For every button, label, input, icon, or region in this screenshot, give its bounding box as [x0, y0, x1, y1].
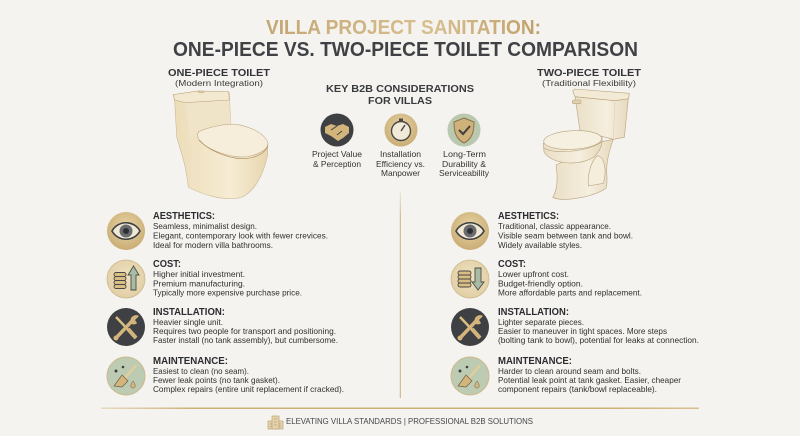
cost row — [451, 258, 642, 298]
consideration: long-term durability: Serviceability — [439, 168, 490, 178]
icon: broom — [451, 357, 489, 395]
consideration: project value — [312, 114, 362, 169]
maintenance row: Fewer leak points (no tank gasket). — [153, 375, 280, 385]
cost row: Higher initial investment. — [153, 269, 245, 279]
aesthetics row — [451, 210, 633, 250]
illustration: one-piece toilet — [173, 91, 268, 199]
icon: crossed tools — [107, 308, 145, 346]
icon: coins and down arrow — [451, 260, 489, 298]
consideration: project value: Project Value — [312, 149, 362, 159]
icon: stopwatch — [384, 114, 418, 146]
maintenance row: Complex repairs (entire unit replacement if cracked). — [153, 384, 344, 394]
maintenance row: MAINTENANCE: — [153, 355, 228, 367]
title — [173, 17, 638, 61]
installation row: Easier to maneuver in tight spaces. More steps — [498, 326, 667, 336]
aesthetics row: Seamless, minimalist design. — [153, 221, 257, 231]
installation row — [107, 306, 338, 346]
heading: key B2B considerations — [326, 83, 474, 107]
footer — [268, 416, 533, 429]
cost row: COST: — [498, 258, 526, 270]
installation row — [451, 306, 699, 346]
consideration: installation efficiency: Installation — [380, 149, 421, 159]
installation row: INSTALLATION: — [153, 306, 225, 318]
icon: broom — [107, 357, 145, 395]
maintenance row — [107, 355, 344, 395]
installation row: Lighter separate pieces. — [498, 317, 584, 327]
cost row: COST: — [153, 258, 181, 270]
heading: one-piece toilet: (Modern Integration) — [175, 78, 263, 88]
aesthetics row: Elegant, contemporary look with fewer crevices. — [153, 230, 328, 240]
maintenance row: Potential leak point at tank gasket. Easier, cheaper — [498, 375, 681, 385]
consideration: project value: & Perception — [313, 159, 361, 169]
aesthetics row: Ideal for modern villa bathrooms. — [153, 240, 273, 250]
aesthetics row: Widely available styles. — [498, 240, 582, 250]
panel: one-piece details — [107, 210, 344, 395]
heading: two-piece toilet: TWO-PIECE TOILET — [537, 67, 642, 79]
heading: one-piece toilet: ONE-PIECE TOILET — [168, 67, 271, 79]
aesthetics row — [107, 210, 328, 250]
icon: handshake — [320, 114, 354, 146]
consideration: installation efficiency — [376, 114, 425, 178]
aesthetics row: AESTHETICS: — [153, 210, 215, 222]
title: VILLA PROJECT SANITATION: — [266, 17, 541, 39]
panel: two-piece details — [451, 210, 699, 395]
consideration: installation efficiency: Efficiency vs. — [376, 159, 425, 169]
cost row: Typically more expensive purchase price. — [153, 288, 302, 298]
maintenance row: MAINTENANCE: — [498, 355, 572, 367]
heading: two-piece toilet — [537, 67, 642, 88]
aesthetics row: Traditional, classic appearance. — [498, 221, 611, 231]
cost row: Budget-friendly option. — [498, 278, 583, 288]
footer rule — [101, 408, 699, 409]
cost row: More affordable parts and replacement. — [498, 288, 642, 298]
heading: key B2B considerations: FOR VILLAS — [368, 95, 432, 107]
installation row: INSTALLATION: — [498, 306, 569, 318]
installation row: Heavier single unit. — [153, 317, 223, 327]
maintenance row: component repairs (tank/bowl replaceable). — [498, 384, 657, 394]
title: ONE-PIECE VS. TWO-PIECE TOILET COMPARISON — [173, 39, 638, 61]
center divider — [400, 192, 401, 398]
cost row — [107, 258, 302, 298]
icon: shield — [448, 114, 480, 146]
installation row: (bolting tank to bowl), potential for leaks at connection. — [498, 335, 699, 345]
heading: two-piece toilet: (Traditional Flexibility) — [542, 78, 636, 88]
icon: crossed tools — [451, 308, 489, 346]
consideration: long-term durability — [439, 114, 490, 178]
maintenance row — [451, 355, 681, 395]
installation row: Requires two people for transport and positioning. — [153, 326, 336, 336]
heading: one-piece toilet — [168, 67, 271, 88]
cost row: Premium manufacturing. — [153, 278, 245, 288]
icon: eye — [107, 212, 145, 250]
consideration: long-term durability: Durability & — [442, 159, 486, 169]
maintenance row: Easiest to clean (no seam). — [153, 366, 249, 376]
illustration: two-piece toilet — [543, 89, 629, 199]
cost row: Lower upfront cost. — [498, 269, 569, 279]
heading: key B2B considerations: KEY B2B CONSIDERATIONS — [326, 83, 474, 95]
icon: villa building — [268, 416, 283, 429]
aesthetics row: AESTHETICS: — [498, 210, 559, 222]
icon: coins and up arrow — [107, 260, 145, 298]
icon: eye — [451, 212, 489, 250]
consideration: long-term durability: Long-Term — [443, 149, 486, 159]
maintenance row: Harder to clean around seam and bolts. — [498, 366, 641, 376]
footer: ELEVATING VILLA STANDARDS | PROFESSIONAL B2B SOLUTIONS — [286, 416, 533, 426]
aesthetics row: Visible seam between tank and bowl. — [498, 230, 633, 240]
consideration: installation efficiency: Manpower — [381, 168, 420, 178]
installation row: Faster install (no tank assembly), but cumbersome. — [153, 335, 338, 345]
